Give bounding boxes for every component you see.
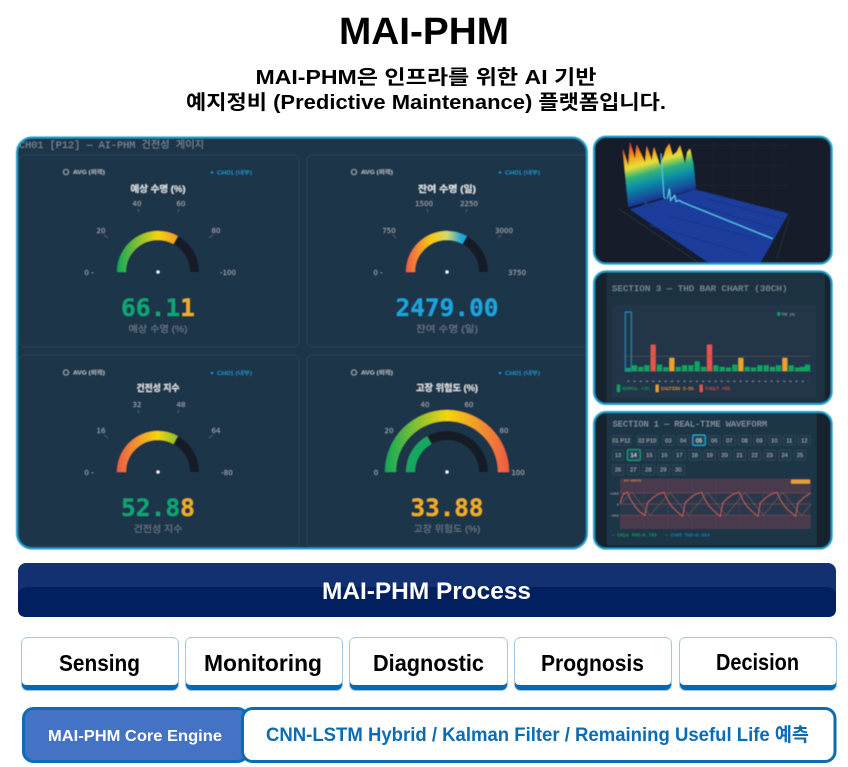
gauge card: health index: CH01 (내부) bbox=[217, 369, 252, 377]
process header bar bbox=[18, 563, 836, 617]
step: Diagnostic bbox=[350, 638, 508, 690]
gauge cards bbox=[19, 155, 597, 547]
channel selector chips: 18 bbox=[692, 453, 698, 459]
panel: 3D waterfall spectrum bbox=[594, 137, 832, 264]
gauge card: health index bbox=[19, 355, 299, 547]
gauge card: remaining life: AVG (외곽) bbox=[361, 168, 393, 176]
chart: highlighted trace bbox=[643, 154, 773, 239]
waveform chart: 0 bbox=[617, 503, 619, 506]
subtitle: MAI-PHM은 인프라를 위한 AI 기반 bbox=[256, 66, 596, 89]
gauge card: remaining life bbox=[307, 155, 597, 347]
gauge card: remaining life: 0 - bbox=[373, 269, 383, 277]
gauge card: failure risk: 80 bbox=[500, 427, 508, 435]
channel selector chips: 20 bbox=[722, 453, 728, 459]
bar chart legend: THD (%) bbox=[781, 312, 795, 316]
gauge card: health index: 32 bbox=[133, 401, 141, 409]
chart: blue floor bbox=[630, 189, 788, 264]
channel selector chips: 30 bbox=[675, 468, 681, 474]
gauge card: predicted life: -100 bbox=[220, 269, 236, 277]
channel selector chips: 08 bbox=[742, 438, 748, 444]
channel selector chips: 27 bbox=[630, 468, 636, 474]
channel selector chips: 25 bbox=[797, 453, 803, 459]
core engine description bbox=[242, 708, 835, 762]
gauge card: health index: 64 bbox=[212, 427, 221, 435]
step: Monitoring: Monitoring bbox=[204, 650, 322, 676]
process header bar: MAI-PHM Process bbox=[322, 578, 531, 605]
gauge card: remaining life: 2250 bbox=[460, 200, 478, 208]
gauge card: health index: 0 - bbox=[84, 469, 94, 477]
step: Sensing bbox=[22, 638, 178, 690]
bar chart heading: SECTION 3 — THD BAR CHART (30CH) bbox=[612, 285, 787, 294]
channel selector chips: 16 bbox=[661, 453, 667, 459]
waveform chart bbox=[610, 479, 811, 529]
core engine description: CNN-LSTM Hybrid / Kalman Filter / Remaining Useful Life 예측 bbox=[266, 724, 809, 746]
channel selector chips: 21 bbox=[737, 453, 743, 459]
channel selector chips: 02 P10 bbox=[638, 438, 656, 444]
dashboard heading: CH01 [P12] — AI-PHM 건전성 게이지 bbox=[19, 139, 204, 152]
gauge card: failure risk: 100 bbox=[511, 469, 525, 477]
core engine label: MAI-PHM Core Engine bbox=[48, 728, 222, 745]
gauge card: remaining life: 잔여 수명 (일) bbox=[418, 183, 476, 194]
step: Decision: Decision bbox=[716, 649, 799, 675]
channel selector chips: 24 bbox=[782, 453, 788, 459]
gauge card: failure risk: 고장 위험도 (%) bbox=[416, 382, 478, 393]
gauge card: remaining life: 1500 bbox=[415, 200, 433, 208]
subtitle bbox=[186, 66, 666, 114]
gauge card: failure risk: CH01 (내부) bbox=[505, 369, 540, 377]
panel: real-time waveform bbox=[594, 412, 832, 549]
subtitle: 예지정비 (Predictive Maintenance) 플랫폼입니다. bbox=[186, 91, 666, 114]
channel selector chips: 07 bbox=[726, 438, 732, 444]
bar chart legend: CAUTION 3-5% bbox=[661, 387, 694, 392]
waveform chart: MAX WARNING bbox=[624, 479, 642, 482]
channel selector chips: 04 bbox=[680, 438, 686, 444]
channel selector chips: 22 bbox=[752, 453, 758, 459]
channel selector chips: 28 bbox=[645, 468, 651, 474]
gauge card: predicted life: 66.11 bbox=[121, 294, 195, 322]
chart: spectrum wall bbox=[623, 142, 696, 207]
channel selector chips: 11 bbox=[786, 438, 792, 444]
gauge card: remaining life: 3750 bbox=[508, 269, 526, 277]
gauge card: predicted life: CH01 (내부) bbox=[217, 168, 252, 176]
channel selector chips bbox=[612, 435, 811, 475]
waveform legend: — CH05 THD=0.894 bbox=[664, 532, 710, 538]
channel selector chips: 15 bbox=[646, 453, 652, 459]
gauge card: health index: 건전성 지수 bbox=[134, 524, 182, 534]
waveform legend bbox=[611, 532, 710, 538]
gauge card: failure risk: 40 bbox=[421, 401, 429, 409]
gauge card: health index: 건전성 지수 bbox=[136, 383, 180, 393]
gauge card: health index: 48 bbox=[177, 401, 185, 409]
gauge card: health index: 16 bbox=[97, 427, 106, 435]
gauge card: predicted life: 예상 수명 (%) bbox=[128, 324, 188, 334]
gauge card: failure risk: 20 bbox=[385, 427, 393, 435]
gauge card: failure risk: AVG (외곽) bbox=[361, 368, 393, 376]
channel selector chips: 12 bbox=[801, 438, 807, 444]
step: Sensing: Sensing bbox=[59, 650, 140, 676]
gauge card: predicted life: 예상 수명 (%) bbox=[130, 183, 186, 194]
channel selector chips: 13 bbox=[615, 453, 621, 459]
channel selector chips: 29 bbox=[660, 468, 666, 474]
gauge card: remaining life: 2479.00 bbox=[396, 294, 498, 322]
gauge card: remaining life: 잔여 수명 (일) bbox=[416, 323, 478, 334]
waveform legend: — CH14 THD=0.799 bbox=[611, 532, 657, 538]
bar chart legend bbox=[617, 312, 795, 392]
process steps bbox=[22, 638, 836, 690]
channel selector chips: 05 bbox=[696, 438, 702, 444]
gauge card: predicted life: 20 bbox=[97, 227, 105, 235]
gauge card: predicted life: 80 bbox=[212, 227, 220, 235]
waveform chart: -1000 bbox=[610, 515, 619, 518]
gauge card: health index: AVG (외곽) bbox=[73, 368, 105, 376]
gauge card: failure risk: 60 bbox=[465, 401, 473, 409]
waveform heading: SECTION 1 — REAL-TIME WAVEFORM bbox=[613, 421, 767, 430]
gauge card: failure risk: 고장 위험도 (%) bbox=[414, 524, 480, 534]
channel selector chips: 03 bbox=[665, 438, 671, 444]
gauge card: health index: 52.88 bbox=[121, 494, 195, 522]
step: Prognosis: Prognosis bbox=[541, 650, 644, 676]
channel selector chips: 17 bbox=[676, 453, 682, 459]
gauge card: failure risk bbox=[307, 355, 597, 547]
gauge card: remaining life: 750 bbox=[382, 227, 396, 235]
title: MAI-PHM bbox=[339, 11, 509, 53]
gauge card: failure risk: 0 bbox=[374, 469, 378, 477]
bar chart legend: NORMAL <3% bbox=[622, 387, 650, 392]
gauge card: remaining life: CH01 (내부) bbox=[505, 168, 540, 176]
step: Decision bbox=[680, 638, 836, 690]
step: Prognosis bbox=[514, 638, 672, 690]
gauge card: predicted life: 0 - bbox=[84, 269, 94, 277]
gauge card: predicted life: 60 bbox=[177, 200, 185, 208]
gauge card: predicted life bbox=[19, 155, 299, 347]
gauge card: failure risk: 33.88 bbox=[410, 494, 484, 522]
waveform chart: +1000 bbox=[610, 492, 619, 495]
gauge card: remaining life: 3000 bbox=[495, 227, 513, 235]
gauge card: health index: -80 bbox=[221, 469, 233, 477]
channel selector chips: 26 bbox=[615, 468, 621, 474]
panel: THD bar chart bbox=[594, 271, 832, 404]
channel selector chips: 23 bbox=[767, 453, 773, 459]
channel selector chips: 10 bbox=[771, 438, 777, 444]
step: Diagnostic: Diagnostic bbox=[373, 650, 484, 676]
step: Monitoring bbox=[186, 638, 342, 690]
bar chart bars bbox=[623, 312, 812, 381]
gauge card: predicted life: AVG (외곽) bbox=[73, 168, 105, 176]
gauge card: predicted life: 40 bbox=[133, 200, 141, 208]
panel: gauge dashboard bbox=[17, 138, 597, 548]
bar chart legend: FAULT >5% bbox=[705, 387, 730, 392]
channel selector chips: 09 bbox=[756, 438, 762, 444]
channel selector chips: 01 P12 bbox=[612, 438, 630, 444]
channel selector chips: 06 bbox=[711, 438, 717, 444]
channel selector chips: 19 bbox=[707, 453, 713, 459]
core engine label bbox=[24, 708, 248, 762]
channel selector chips: 14 bbox=[631, 453, 637, 459]
